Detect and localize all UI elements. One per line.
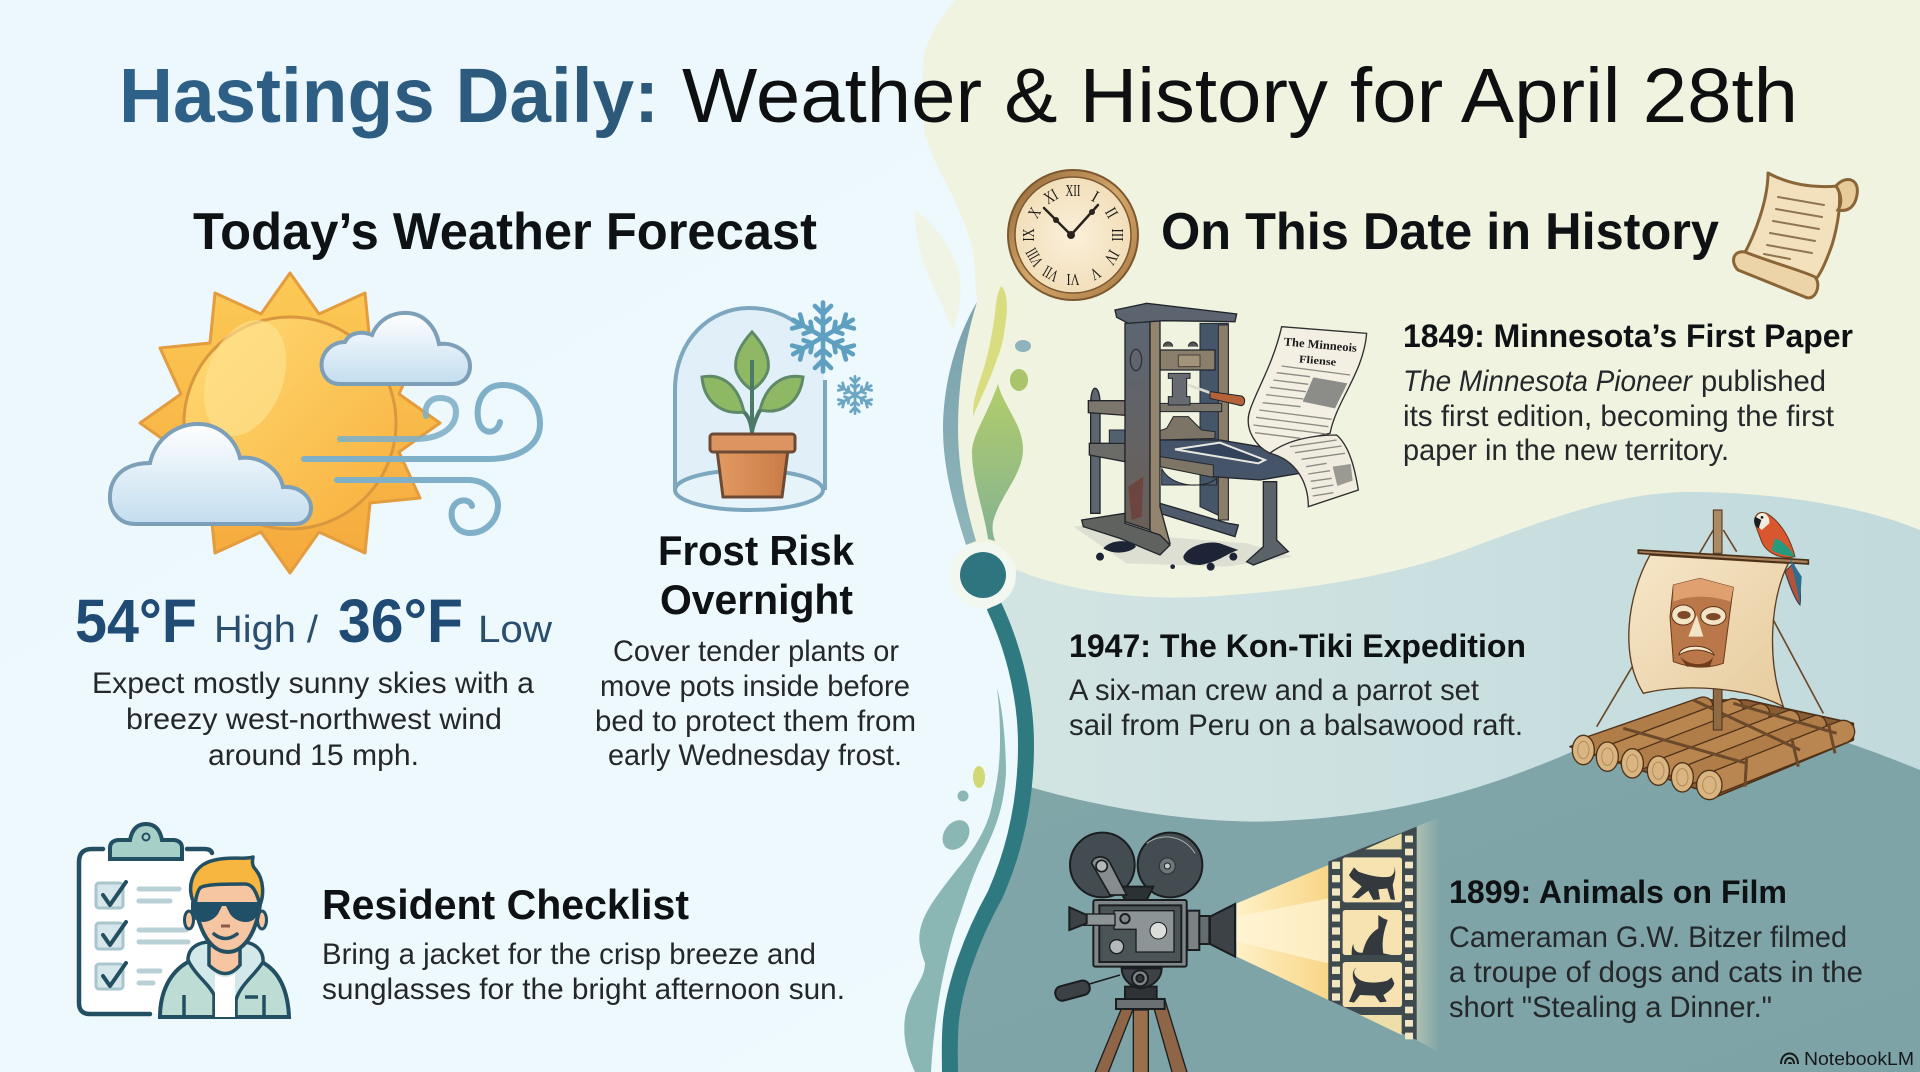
heading: Today's Weather Forecast: Today’s Weather Forecast [193, 203, 817, 261]
text: forecast description [92, 667, 534, 772]
icon: wall clock with roman numerals: VII [1039, 261, 1062, 286]
title [119, 53, 1798, 139]
icon: sun with clouds and wind [110, 273, 540, 573]
text: frost advice: move pots inside before [600, 670, 910, 703]
icon: wall clock with roman numerals: XII [1066, 181, 1081, 200]
text: 1899 description: a troupe of dogs and cats in the [1449, 956, 1863, 989]
icon: wall clock with roman numerals: VIII [1022, 245, 1047, 270]
heading: Frost Risk Overnight: Frost Risk [658, 527, 855, 574]
text: checklist description: Bring a jacket for the crisp breeze and [322, 938, 816, 971]
block: 1947 Kon-Tiki [1069, 510, 1853, 800]
central decorative spine [904, 210, 1031, 1072]
temperature readout: Low [478, 609, 553, 651]
text: 1849 description: published [1701, 365, 1826, 398]
panel: middle teal wave band [950, 492, 1920, 1072]
icon: wall clock with roman numerals: V [1086, 263, 1104, 284]
panel: weather forecast [75, 203, 916, 772]
panel: resident checklist [79, 824, 845, 1017]
text: 1947 description [1069, 674, 1523, 742]
icon: wall clock with roman numerals: I [1088, 187, 1102, 206]
temperature readout: High / [214, 609, 318, 651]
text: 1947 description: sail from Peru on a balsawood raft. [1069, 709, 1523, 742]
heading: Frost Risk Overnight: Overnight [660, 576, 853, 623]
text: frost advice: bed to protect them from [595, 705, 916, 738]
illustration: Kon-Tiki raft with sail, mask and parrot [1570, 510, 1853, 800]
panel: history [1008, 170, 1863, 1072]
text: 1849 description [1403, 365, 1835, 467]
heading: 1849: 1849: Minnesota’s First Paper [1403, 318, 1853, 354]
icon: wall clock with roman numerals: IX [1019, 228, 1038, 242]
title: Weather & History for April 28th [682, 53, 1798, 139]
icon: parchment scroll [1734, 173, 1857, 298]
temperature readout: 54°F [75, 587, 197, 655]
text: 1849 description: The Minnesota Pioneer [1403, 365, 1693, 398]
text: 1849 description: paper in the new territory. [1403, 434, 1729, 467]
watermark: NotebookLM: NotebookLM [1804, 1049, 1914, 1069]
text: frost advice [595, 635, 916, 772]
panel: beige history background [922, 0, 1920, 620]
icon: wall clock with roman numerals: XI [1040, 185, 1061, 208]
text: 1899 description [1449, 921, 1863, 1024]
text: frost advice: early Wednesday frost. [608, 739, 902, 772]
icon: wall clock with roman numerals: VI [1066, 270, 1080, 289]
text: 1899 description: short "Stealing a Dinner." [1449, 991, 1772, 1024]
illustration: printing press with newspaper: The Minneois [1283, 335, 1358, 355]
block: 1849 Minnesota's First Paper [1073, 303, 1853, 571]
heading: 1947: 1947: The Kon-Tiki Expedition [1069, 628, 1526, 664]
illustration: printing press with newspaper [1073, 303, 1367, 571]
heading: Resident Checklist: Resident Checklist [322, 881, 689, 928]
icon: potted plant under glass dome with snowflakes [675, 302, 873, 510]
icon: wall clock with roman numerals: IV [1100, 246, 1123, 269]
text: 1849 description: its first edition, becoming the first [1403, 400, 1835, 433]
icon: wall clock with roman numerals: II [1101, 204, 1122, 222]
text: forecast description: Expect mostly sunny skies with a [92, 667, 534, 700]
heading: On This Date in History: On This Date in History [1161, 203, 1719, 261]
illustration: film camera projecting a filmstrip of cats [1054, 817, 1440, 1072]
text: frost advice: Cover tender plants or [613, 635, 899, 668]
icon: wall clock with roman numerals: III [1108, 228, 1127, 242]
text: 1947 description: A six-man crew and a parrot set [1069, 674, 1480, 707]
temperature readout [75, 587, 553, 655]
heading: 1899: 1899: Animals on Film [1449, 874, 1787, 910]
text: 1899 description: Cameraman G.W. Bitzer filmed [1449, 921, 1847, 954]
text: forecast description: breezy west-northwest wind [126, 703, 502, 736]
temperature readout: 36°F [338, 587, 463, 655]
text: checklist description: sunglasses for the bright afternoon sun. [322, 973, 845, 1006]
icon: wall clock with roman numerals: X [1024, 204, 1045, 221]
text: checklist description [322, 938, 845, 1006]
text: forecast description: around 15 mph. [208, 739, 419, 772]
block: 1899 Animals on Film [1054, 817, 1863, 1072]
title: Hastings Daily: [119, 53, 659, 139]
icon: clipboard and person in sunglasses [79, 824, 289, 1017]
panel: bottom dark teal wave band [950, 718, 1920, 1072]
heading: Frost Risk Overnight [658, 527, 855, 623]
illustration: printing press with newspaper: Fliense [1298, 354, 1337, 369]
icon: wall clock with roman numerals [1008, 170, 1138, 300]
